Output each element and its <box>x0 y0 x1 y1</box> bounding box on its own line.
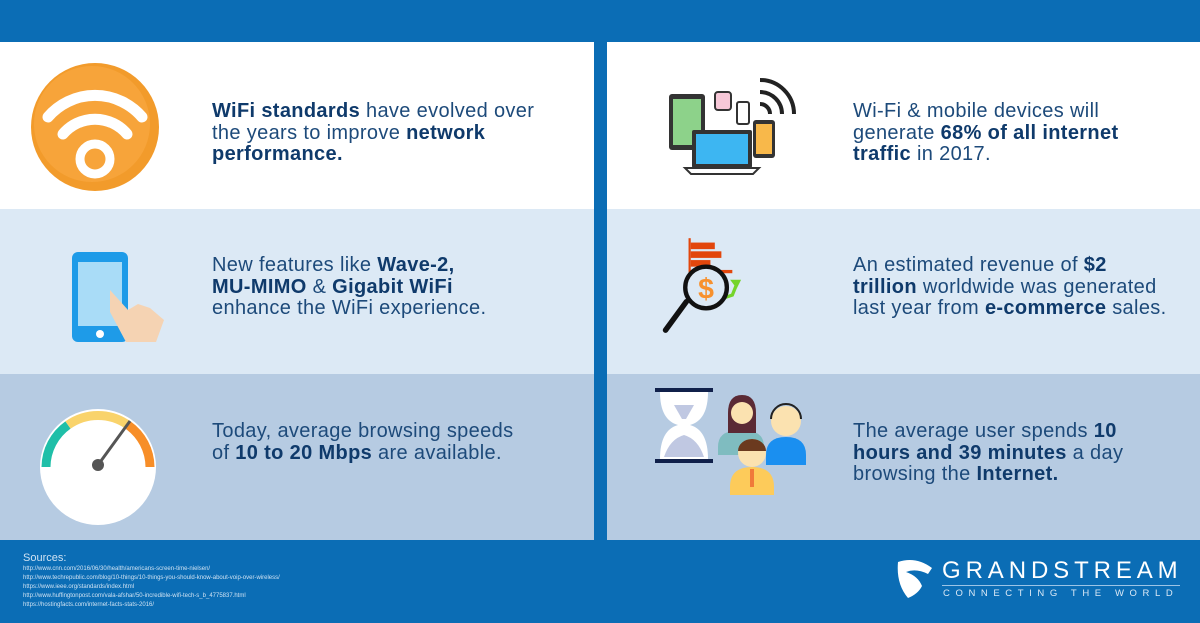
sources block: https://hostingfacts.com/internet-facts-stats-2016/ <box>23 602 154 608</box>
sources block: http://www.huffingtonpost.com/vala-afshar/50-incredible-wifi-tech-s_b_4775837.html <box>23 593 246 599</box>
text: wifi standards: the years to improve network <box>212 122 485 144</box>
text: ecommerce revenue: last year from e-commerce sales. <box>853 297 1167 319</box>
text: browsing time <box>853 420 1123 485</box>
panel: right row 2 <box>607 209 1200 374</box>
icon: logo mark <box>898 560 932 598</box>
text: wifi standards: performance. <box>212 143 343 165</box>
text: browsing time: hours and 39 minutes a day <box>853 442 1123 464</box>
text: new features: enhance the WiFi experience. <box>212 297 486 319</box>
panel: left row 3 <box>0 374 594 540</box>
icon: speedometer <box>40 409 156 525</box>
text: new features <box>212 254 486 319</box>
text: new features: New features like Wave-2, <box>212 254 455 276</box>
text: mobile traffic: Wi-Fi & mobile devices will <box>853 100 1099 122</box>
text: browsing speeds <box>212 420 513 464</box>
text: browsing speeds: of 10 to 20 Mbps are available. <box>212 442 502 464</box>
icon: magnifier with dollar: $ <box>698 273 714 305</box>
sources block <box>23 552 280 608</box>
panel: right row 1 <box>607 42 1200 209</box>
panel: left row 2 <box>0 209 594 374</box>
icon: devices <box>669 78 796 175</box>
text: browsing time: The average user spends 10 <box>853 420 1117 442</box>
text: wifi standards: WiFi standards have evolved over <box>212 100 534 122</box>
icon: magnifier with dollar <box>662 238 741 333</box>
text: wifi standards <box>212 100 534 165</box>
text: brand name: GRANDSTREAM <box>942 557 1183 584</box>
text: ecommerce revenue: An estimated revenue of $2 <box>853 254 1107 276</box>
icon: hourglass and people <box>655 388 806 495</box>
text: tagline: CONNECTING THE WORLD <box>943 588 1178 599</box>
sources block: https://www.ieee.org/standards/index.html <box>23 584 134 590</box>
panel: right row 3 <box>607 374 1200 540</box>
logo: grandstream <box>898 557 1183 599</box>
sources block: http://www.techrepublic.com/blog/10-things/10-things-you-should-know-about-voip-over-wireless/ <box>23 575 280 581</box>
text: mobile traffic <box>853 100 1118 165</box>
text: mobile traffic: traffic in 2017. <box>853 143 991 165</box>
text: ecommerce revenue <box>853 254 1167 319</box>
text: mobile traffic: generate 68% of all internet <box>853 122 1118 144</box>
text: browsing time: browsing the Internet. <box>853 463 1059 485</box>
icon: wifi orange circle <box>31 63 159 191</box>
panel: left row 1 <box>0 42 594 209</box>
text: ecommerce revenue: trillion worldwide was generated <box>853 276 1157 298</box>
sources block: http://www.cnn.com/2016/06/30/health/americans-screen-time-nielsen/ <box>23 566 210 572</box>
text: browsing speeds: Today, average browsing speeds <box>212 420 513 442</box>
sources block: Sources: <box>23 552 66 564</box>
icon: tablet with hand <box>72 252 164 342</box>
text: new features: MU-MIMO & Gigabit WiFi <box>212 276 453 298</box>
